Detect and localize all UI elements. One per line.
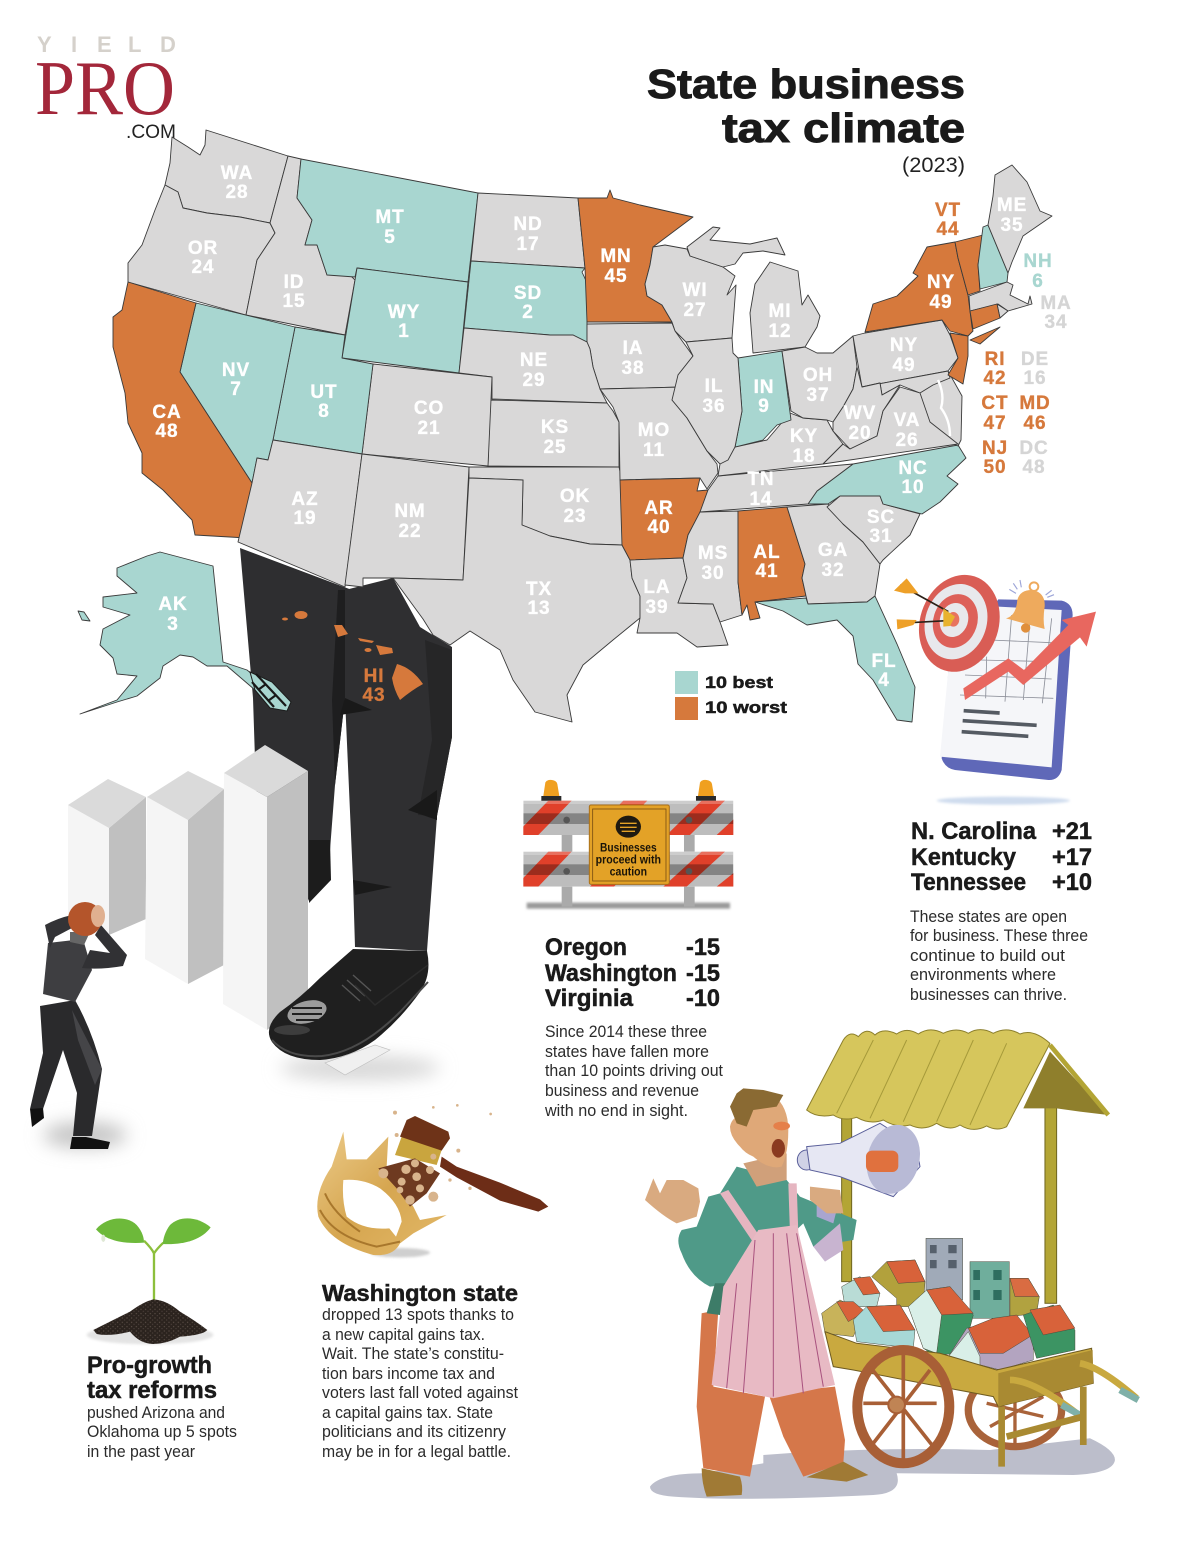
state rank labels: NV <box>222 360 250 381</box>
state rank labels: IN <box>754 377 774 398</box>
state: MI upper <box>687 227 785 267</box>
Chesapeake Bay <box>938 380 950 436</box>
state: NV <box>180 303 295 483</box>
state rank labels: OK <box>560 486 590 507</box>
logo: Yield Pro: YIELD <box>37 32 176 57</box>
state rank labels: NY <box>927 272 955 293</box>
state rank labels: 24 <box>192 257 214 278</box>
state rank labels: 35 <box>1001 215 1023 236</box>
state: Chesapeake coast <box>915 371 962 446</box>
state: MD and DE <box>862 371 950 395</box>
state rank labels: 23 <box>564 506 586 527</box>
state rank labels: GA <box>818 540 848 561</box>
state rank labels: 7 <box>230 379 242 400</box>
map: contiguous US states <box>113 130 1052 722</box>
state rank labels: MI <box>769 301 791 322</box>
legend <box>675 671 787 720</box>
megaphone <box>797 1119 927 1262</box>
state rank labels: ID <box>284 272 304 293</box>
text block: rising states: +17 <box>1052 844 1092 871</box>
text block: pro-growth tax reforms: in the past year <box>87 1443 195 1461</box>
state rank labels: ME <box>997 195 1027 216</box>
text block: rising states: Kentucky <box>911 844 1017 871</box>
state rank labels: 46 <box>1024 413 1046 434</box>
state: KY <box>718 413 843 476</box>
state rank labels: OR <box>188 238 218 259</box>
vendor shoes <box>702 1462 868 1497</box>
state: GA <box>787 504 880 604</box>
state rank labels: 15 <box>283 291 305 312</box>
state rank labels: 13 <box>528 598 550 619</box>
state rank labels: HI <box>364 666 384 687</box>
text block: pro-growth tax reforms: Pro-growth <box>87 1352 212 1379</box>
state rank labels: 45 <box>605 266 627 287</box>
state: TX <box>393 478 640 722</box>
state rank labels: NE <box>520 350 548 371</box>
state rank labels: 20 <box>849 423 871 444</box>
state rank labels: 44 <box>937 219 959 240</box>
state rank labels: 22 <box>399 521 421 542</box>
state rank labels: AL <box>753 542 781 563</box>
state: WY <box>342 268 468 373</box>
state: AL <box>738 507 806 620</box>
bar: short <box>68 779 146 935</box>
warning sign: caution <box>610 865 647 879</box>
state rank labels: 19 <box>294 508 316 529</box>
state: MS <box>678 511 742 622</box>
state rank labels: 38 <box>622 358 644 379</box>
icon: target, bell and rising chart clipboard <box>894 564 1096 805</box>
state: RI <box>997 304 1008 318</box>
text block: rising states: These states are open <box>910 908 1067 926</box>
state rank labels: OH <box>803 365 833 386</box>
logo: Yield Pro: .COM <box>126 122 176 143</box>
state rank labels: WV <box>844 403 876 424</box>
state: OH <box>782 336 857 422</box>
illustration: vendor with megaphone selling houses from a cart <box>645 1030 1138 1499</box>
state: IA <box>587 323 693 389</box>
text block: Washington state: dropped 13 spots thanks to <box>322 1306 514 1324</box>
text block: Washington state: voters last fall voted against <box>322 1384 518 1402</box>
warning light right <box>696 780 716 801</box>
title: tax climate <box>722 105 965 151</box>
state rank labels: 16 <box>1024 368 1046 389</box>
state: WI <box>645 245 736 342</box>
legend: 10 best <box>705 673 773 692</box>
logo: Yield Pro: PRO <box>35 45 175 131</box>
state: OK <box>469 467 622 545</box>
state: ND <box>471 193 585 268</box>
text block: falling states: Virginia <box>545 985 634 1012</box>
state rank labels: 5 <box>384 227 396 248</box>
lower rail <box>523 852 734 887</box>
state rank labels: 39 <box>646 597 668 618</box>
state rank labels: 31 <box>870 526 892 547</box>
text block: Washington state: a new capital gains tax. <box>322 1326 485 1344</box>
state: VA <box>823 387 958 464</box>
state rank labels: SD <box>514 283 542 304</box>
state: NM <box>345 454 469 587</box>
text block: Washington state <box>322 1280 518 1461</box>
text block: pro-growth tax reforms <box>87 1352 237 1461</box>
state rank labels: 48 <box>156 421 178 442</box>
text block: falling states: with no end in sight. <box>544 1102 688 1120</box>
text block: rising states <box>910 818 1092 1004</box>
state rank labels: 42 <box>984 368 1006 389</box>
state: SC <box>827 496 920 564</box>
text block: Washington state: Washington state <box>322 1280 518 1306</box>
text block: pro-growth tax reforms: Oklahoma up 5 spots <box>87 1423 237 1441</box>
state: FL <box>755 596 915 722</box>
state rank labels: 37 <box>807 385 829 406</box>
state rank labels: 14 <box>750 489 772 510</box>
state: VT <box>955 235 983 295</box>
state: AK <box>78 552 291 714</box>
state: NE <box>459 328 607 403</box>
state rank labels: NC <box>898 458 928 479</box>
state rank labels: NM <box>394 501 426 522</box>
warning light left <box>541 780 561 801</box>
text block: falling states: Since 2014 these three <box>545 1023 707 1041</box>
state rank labels: 48 <box>1023 457 1045 478</box>
state rank labels: 41 <box>756 561 778 582</box>
text block: Washington state: Wait. The state’s constitu- <box>322 1345 504 1363</box>
state rank labels: FL <box>871 651 897 672</box>
state rank labels: CA <box>152 402 182 423</box>
state rank labels: 47 <box>984 413 1006 434</box>
state: ME <box>988 165 1052 273</box>
state rank labels: 2 <box>522 302 534 323</box>
state rank labels: NY <box>890 335 918 356</box>
state rank labels: WY <box>388 302 420 323</box>
state rank labels: ND <box>513 214 543 235</box>
state: HI <box>282 611 423 700</box>
state: CT <box>970 304 1000 329</box>
state rank labels: MD <box>1019 393 1051 414</box>
front wheel <box>857 1350 949 1463</box>
state rank labels: MA <box>1040 293 1072 314</box>
text block: Washington state: may be in for a legal battle. <box>322 1443 511 1461</box>
text block: rising states: for business. These three <box>910 927 1088 945</box>
state: MT <box>297 159 478 282</box>
text block: rising states: +21 <box>1052 818 1092 845</box>
state rank labels: 10 <box>902 477 924 498</box>
vendor head <box>730 1088 790 1187</box>
state rank labels: KY <box>790 426 818 447</box>
bar: tall <box>223 745 308 1030</box>
state rank labels: WI <box>682 280 708 301</box>
state rank labels: MS <box>698 543 728 564</box>
state: CO <box>362 364 492 466</box>
state rank labels: VT <box>935 200 961 221</box>
state: AR <box>620 478 708 560</box>
state rank labels: 12 <box>769 321 791 342</box>
text block: falling states: Washington <box>545 960 677 987</box>
state rank labels: 28 <box>226 182 248 203</box>
state: AZ <box>238 440 362 587</box>
state rank labels: 36 <box>703 396 725 417</box>
state: UT <box>273 327 373 454</box>
warning sign: Businesses <box>600 841 657 855</box>
illustration: worried businessman <box>30 902 127 1149</box>
state rank labels: SC <box>867 507 895 528</box>
state rank labels: 34 <box>1045 312 1067 333</box>
icon: black shoe with IRS seal <box>269 949 428 1060</box>
state rank labels: RI <box>985 349 1005 370</box>
warning sign <box>589 805 669 884</box>
bar: medium <box>145 771 224 984</box>
buildings and houses on cart <box>822 1238 1075 1370</box>
state rank labels: 9 <box>758 396 770 417</box>
text block: Washington state: tion bars income tax and <box>322 1365 495 1383</box>
state: SD <box>464 261 587 342</box>
title <box>647 61 965 177</box>
state rank labels: DE <box>1021 349 1049 370</box>
cart body <box>825 1332 1138 1467</box>
state: NJ <box>948 333 968 384</box>
state rank labels: AZ <box>291 489 319 510</box>
state: NH <box>978 225 1008 289</box>
state rank labels: TN <box>747 469 775 490</box>
cart roof <box>807 1030 1108 1129</box>
state: LA <box>630 558 728 647</box>
text block: falling states: -15 <box>686 934 720 961</box>
state: NY <box>865 242 973 336</box>
text block: falling states: -10 <box>686 985 720 1012</box>
text block: pro-growth tax reforms: pushed Arizona and <box>87 1404 225 1422</box>
state rank labels: AR <box>644 498 674 519</box>
state rank labels: 25 <box>544 437 566 458</box>
vendor shirt <box>678 1167 857 1315</box>
state: OR <box>128 185 275 315</box>
state rank labels: WA <box>221 163 253 184</box>
state: MN <box>578 190 693 322</box>
state rank labels: 18 <box>793 446 815 467</box>
state rank labels: 4 <box>878 670 890 691</box>
text block: falling states <box>544 934 723 1120</box>
text block: rising states: N. Carolina <box>911 818 1037 845</box>
cart posts <box>842 1067 1057 1303</box>
state rank labels: CT <box>981 393 1009 414</box>
text block: rising states: +10 <box>1052 869 1092 896</box>
icon: IRS road barricade <box>523 780 734 910</box>
state: MI lower <box>750 262 820 353</box>
state rank labels: 29 <box>523 370 545 391</box>
state rank labels: 3 <box>167 614 179 635</box>
state rank labels: 40 <box>648 517 670 538</box>
legend: 10 worst <box>705 698 787 717</box>
state rank labels: MT <box>375 207 405 228</box>
text block: rising states: continue to build out <box>910 947 1065 965</box>
text block: falling states: than 10 points driving out <box>545 1062 723 1080</box>
state rank labels: 50 <box>984 457 1006 478</box>
state rank labels: IA <box>623 338 643 359</box>
state rank labels: MN <box>600 246 632 267</box>
vendor hand <box>645 1178 700 1223</box>
state rank labels: CO <box>414 398 444 419</box>
state: IL <box>672 338 742 464</box>
state rank labels: 49 <box>930 292 952 313</box>
vendor apron <box>712 1183 835 1398</box>
state rank labels: NJ <box>982 438 1008 459</box>
state rank labels: LA <box>643 577 671 598</box>
state rank labels: 30 <box>702 563 724 584</box>
state rank labels: 21 <box>418 418 440 439</box>
text block: rising states: businesses can thrive. <box>910 986 1067 1004</box>
text block: Washington state: a capital gains tax. State <box>322 1404 493 1422</box>
state: WV <box>833 367 900 449</box>
state rank labels: TX <box>526 579 552 600</box>
state rank labels: IL <box>705 376 723 397</box>
state: MO <box>600 387 718 489</box>
state rank labels: 26 <box>896 430 918 451</box>
state rank labels: 6 <box>1032 271 1044 292</box>
text block: rising states: Tennessee <box>911 869 1026 896</box>
state: PA <box>853 320 958 387</box>
state rank labels: KS <box>541 417 569 438</box>
state: NC <box>808 445 966 514</box>
state: WA <box>165 130 288 223</box>
state rank labels: 27 <box>684 300 706 321</box>
icon: gavel smashing gold crown <box>317 1104 548 1257</box>
state rank labels: DC <box>1019 438 1049 459</box>
title: State business <box>647 61 965 107</box>
state rank labels: 11 <box>643 440 665 461</box>
state rank labels: 43 <box>363 685 385 706</box>
illustration: giant IRS leg stepping on bars <box>68 548 452 1080</box>
warning sign: proceed with <box>596 853 661 867</box>
state rank labels: NH <box>1023 251 1053 272</box>
back wheel <box>968 1373 1062 1447</box>
text block: falling states: business and revenue <box>545 1082 699 1100</box>
state rank labels <box>152 163 1072 706</box>
state: CA <box>113 282 258 538</box>
state: MA <box>969 282 1032 311</box>
title: (2023) <box>902 154 965 177</box>
state rank labels: AK <box>158 594 188 615</box>
state: ID <box>246 156 355 335</box>
text block: falling states: -15 <box>686 960 720 987</box>
text block: rising states: environments where <box>910 966 1056 984</box>
state rank labels: VA <box>894 410 920 431</box>
state rank labels: UT <box>310 382 338 403</box>
text block: Washington state: politicians and its citizenry <box>322 1423 507 1441</box>
state rank labels: 1 <box>398 321 410 342</box>
state rank labels: 17 <box>517 234 539 255</box>
text block: falling states: states have fallen more <box>545 1043 709 1061</box>
vendor trousers <box>697 1310 845 1477</box>
state rank labels: 49 <box>893 355 915 376</box>
state: IN <box>735 351 791 447</box>
upper rail <box>523 800 734 835</box>
text block: falling states: Oregon <box>545 934 627 961</box>
state: KS <box>488 400 619 467</box>
state rank labels: MO <box>638 420 670 441</box>
state rank labels: 8 <box>318 401 330 422</box>
state rank labels: 32 <box>822 560 844 581</box>
state: TN <box>700 464 853 512</box>
state: Long Island <box>970 327 1000 344</box>
text block: pro-growth tax reforms: tax reforms <box>87 1377 217 1404</box>
icon: seedling in soil <box>87 1218 213 1344</box>
